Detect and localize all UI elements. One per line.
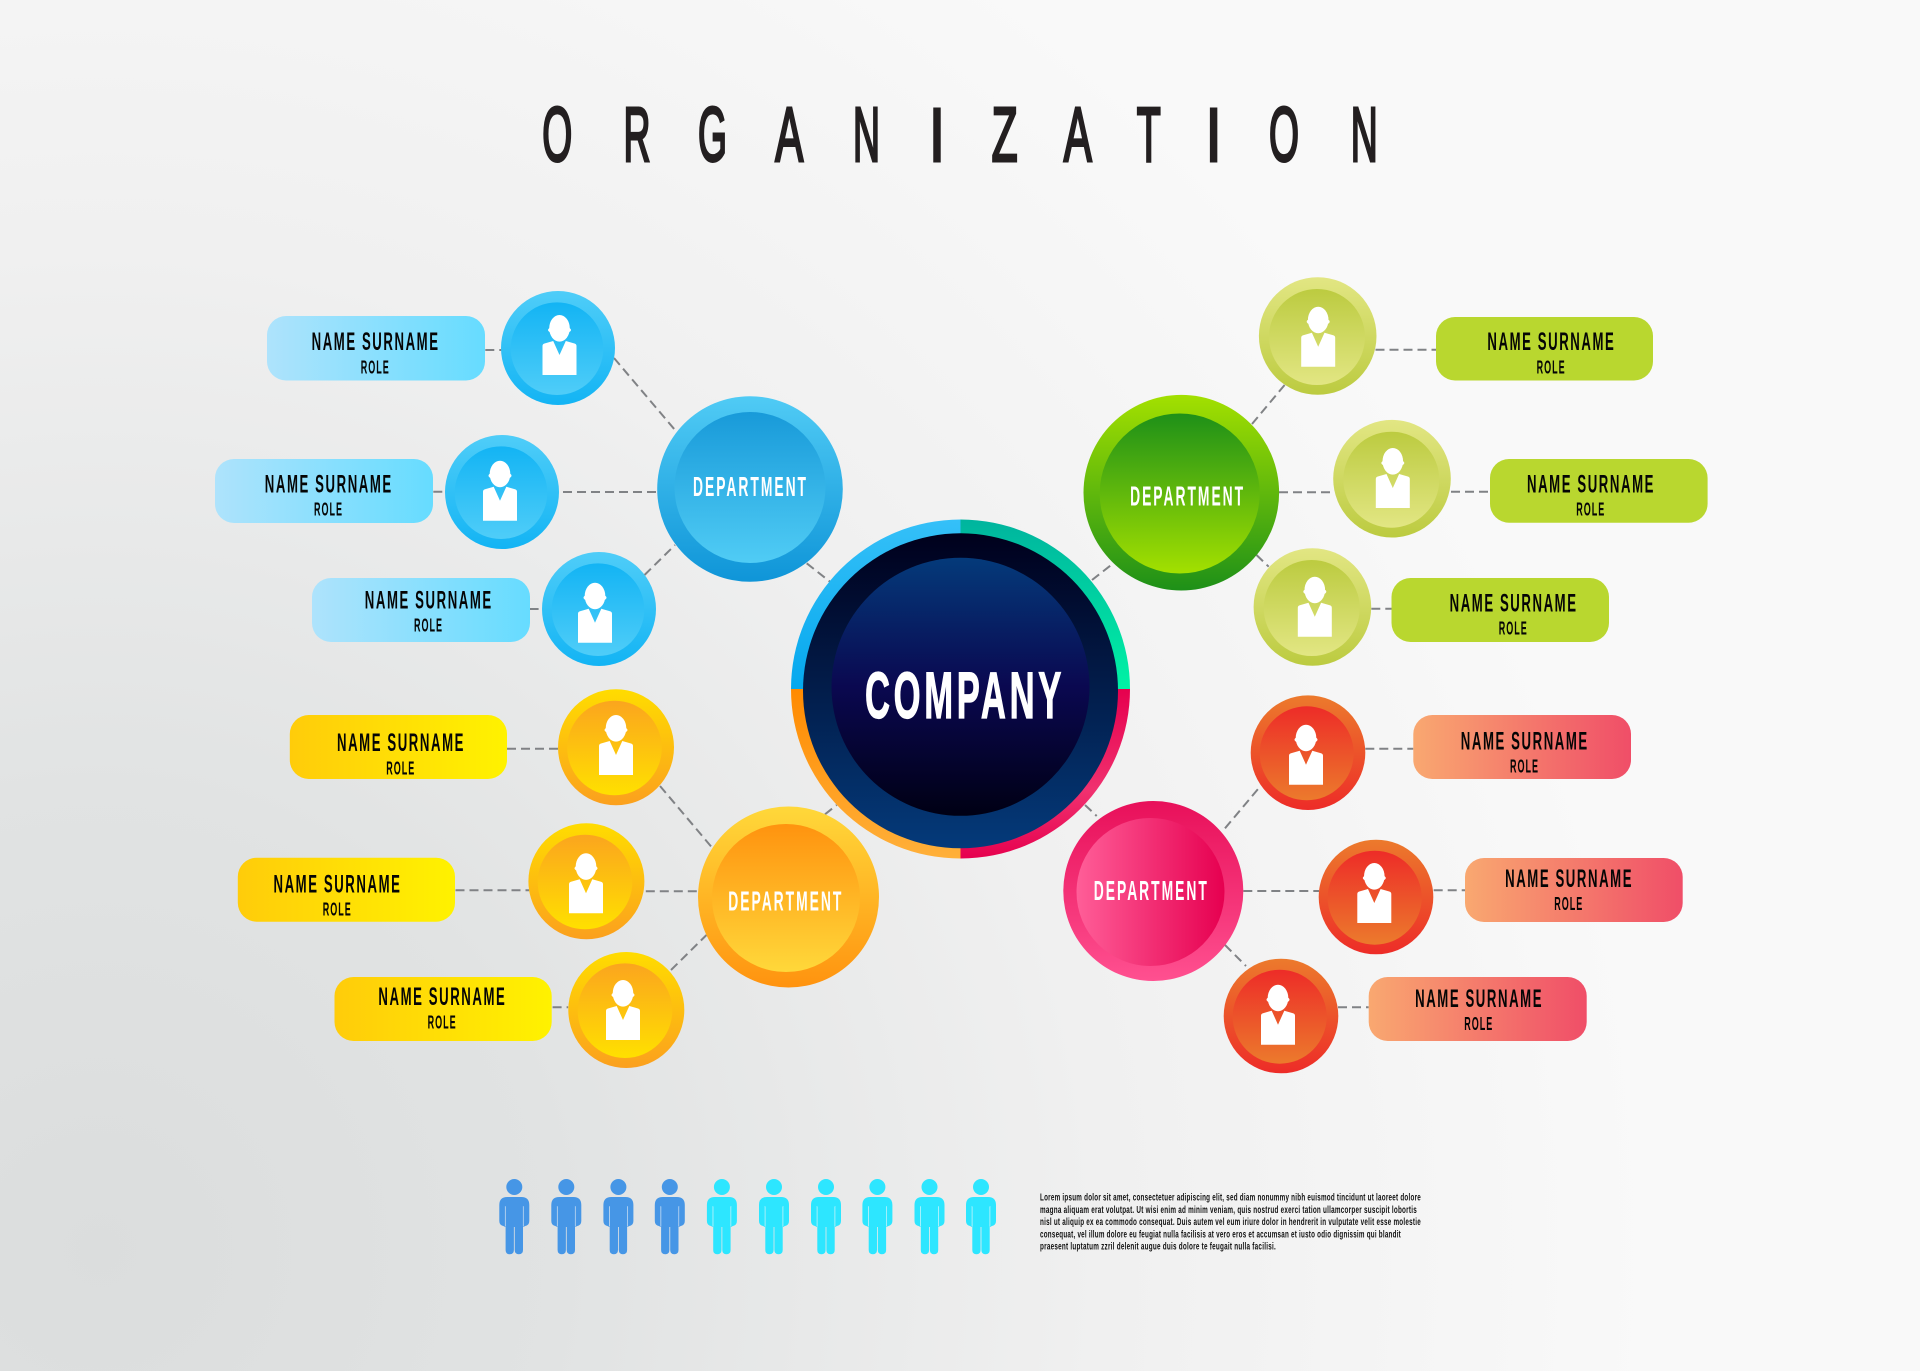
member: blue 3: ROLE (414, 615, 443, 636)
department node: green: DEPARTMENT (1130, 480, 1245, 511)
member: blue 1: NAME SURNAME (312, 328, 440, 356)
member: yellow 3: ROLE (428, 1011, 457, 1032)
member: red 1: NAME SURNAME (1461, 727, 1589, 755)
member: yellow 3: NAME SURNAME (378, 983, 506, 1011)
department node: green (1084, 395, 1279, 590)
title: O (1269, 92, 1299, 178)
member: green 1: NAME SURNAME (1487, 328, 1615, 356)
member: yellow 1: NAME SURNAME (337, 729, 465, 757)
title: A (1064, 92, 1092, 178)
member: green 2: ROLE (1576, 499, 1605, 520)
member: red 2: NAME SURNAME (1505, 865, 1633, 893)
member: yellow 2: NAME SURNAME (274, 870, 402, 898)
panel: orange department branch (238, 689, 879, 1068)
department node: pink: DEPARTMENT (1094, 875, 1209, 906)
member: red 2 (1319, 840, 1683, 954)
text block: lorem ipsum paragraph: praesent luptatum zzril delenit augue duis dolore te feugait nulla facilisi. (1040, 1241, 1276, 1253)
department node: blue (657, 396, 843, 582)
member: red 3 (1224, 959, 1587, 1073)
member: green 3: NAME SURNAME (1450, 590, 1578, 618)
member: yellow 3 (334, 952, 684, 1068)
member: red 2: ROLE (1554, 893, 1583, 914)
member: blue 3: NAME SURNAME (365, 587, 493, 615)
title: Z (992, 92, 1018, 178)
member: red 1: ROLE (1510, 756, 1539, 777)
department node: orange (698, 806, 879, 988)
title: O (542, 92, 572, 178)
member: green 1: ROLE (1537, 356, 1566, 377)
text: N (1351, 92, 1378, 178)
title: A (775, 92, 804, 178)
member: blue 1 (267, 291, 615, 405)
text block: lorem ipsum paragraph (1040, 1192, 1421, 1253)
text block: lorem ipsum paragraph: consequat, vel illum dolore eu feugiat nulla facilisis at vero eros et accumsan et iusto odio dignissim qui blandit (1040, 1228, 1401, 1240)
panel: blue department branch (215, 291, 843, 666)
member: blue 1: ROLE (361, 356, 390, 377)
member: blue 2 (215, 435, 559, 549)
people pictogram row (499, 1179, 996, 1254)
member: red 1 (1251, 695, 1631, 810)
member: green 3 (1254, 548, 1609, 666)
text block: lorem ipsum paragraph: Lorem ipsum dolor sit amet, consectetuer adipiscing elit, sed diam nonummy nibh euismod tincidunt ut laoreet dolore (1040, 1192, 1421, 1204)
title: I (926, 90, 948, 179)
department node: pink (1063, 801, 1243, 981)
panel: pink department branch (1063, 695, 1683, 1073)
text block: lorem ipsum paragraph: nisl ut aliquip ex ea commodo consequat. Duis autem vel eum iriure dolor in hendrerit in vulputate velit esse molestie (1040, 1216, 1421, 1228)
member: red 3: NAME SURNAME (1415, 985, 1543, 1013)
department node: blue: DEPARTMENT (693, 471, 808, 502)
member: yellow 1: ROLE (386, 757, 415, 778)
member: blue 2: NAME SURNAME (265, 470, 393, 498)
member: yellow 2: ROLE (323, 899, 352, 920)
title: R (624, 92, 650, 178)
member: green 2 (1333, 420, 1708, 538)
title: N (853, 92, 880, 178)
member: yellow 2 (238, 823, 644, 939)
member: blue 3 (312, 552, 656, 666)
panel: green department branch (1084, 277, 1708, 666)
title: I (1202, 90, 1225, 179)
department node: orange: DEPARTMENT (728, 886, 843, 917)
central company node: COMPANY (865, 658, 1065, 732)
central company node (791, 520, 1130, 858)
member: yellow 1 (290, 689, 674, 805)
member: red 3: ROLE (1464, 1013, 1493, 1034)
member: green 2: NAME SURNAME (1527, 470, 1655, 498)
text block: lorem ipsum paragraph: magna aliquam erat volutpat. Ut wisi enim ad minim veniam, quis nostrud exerci tation ullamcorper suscipit lobortis (1040, 1204, 1417, 1216)
member: green 1 (1259, 277, 1653, 395)
title (542, 90, 1378, 179)
member: green 3: ROLE (1499, 618, 1528, 639)
title: T (1137, 92, 1161, 178)
member: blue 2: ROLE (314, 499, 343, 520)
title: G (698, 92, 727, 178)
